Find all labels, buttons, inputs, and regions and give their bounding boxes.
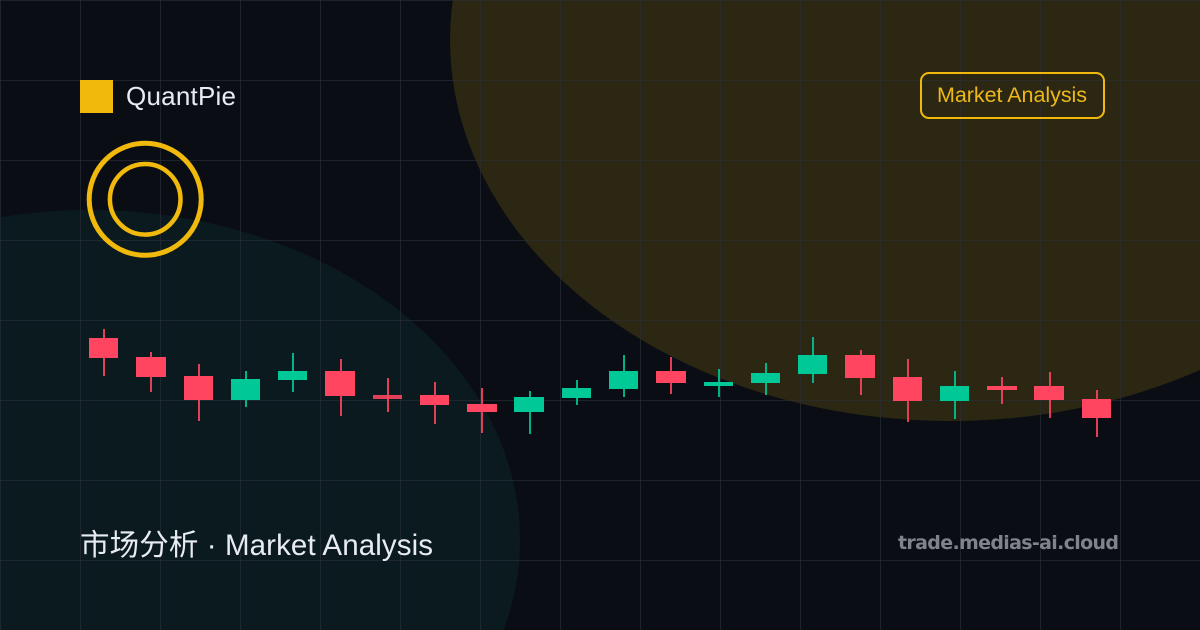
candle 9	[467, 388, 497, 433]
badge: Market Analysis: Market Analysis	[937, 83, 1087, 107]
candle 15	[751, 363, 780, 395]
logo mark	[80, 80, 113, 113]
background shape: teal blob	[0, 210, 520, 630]
candle 5	[278, 353, 307, 392]
candle 21	[1034, 372, 1064, 418]
candle 11	[562, 380, 591, 405]
website url: trade.medias-ai.cloud	[898, 532, 1119, 554]
candle 16	[798, 337, 827, 383]
badge: Market Analysis	[921, 73, 1104, 118]
candle 6	[325, 359, 355, 416]
candle 1	[89, 329, 118, 376]
candle 19	[940, 371, 969, 419]
title: 市场分析 · Market Analysis	[80, 529, 433, 562]
candlestick chart	[89, 329, 1111, 437]
candle 22	[1082, 390, 1111, 437]
icon: concentric rings	[89, 143, 201, 255]
candle 2	[136, 352, 166, 392]
candle 13	[656, 357, 686, 394]
candle 14	[704, 369, 733, 397]
candle 12	[609, 355, 638, 397]
candle 17	[845, 350, 875, 395]
candle 7	[373, 378, 402, 412]
candle 3	[184, 364, 213, 421]
candle 20	[987, 377, 1017, 404]
candle 8	[420, 382, 449, 424]
brand name: QuantPie	[126, 81, 236, 111]
candle 10	[514, 391, 544, 434]
background shape: gold blob	[450, 0, 1200, 421]
logo	[80, 80, 236, 113]
candle 18	[893, 359, 922, 422]
candle 4	[231, 371, 260, 407]
